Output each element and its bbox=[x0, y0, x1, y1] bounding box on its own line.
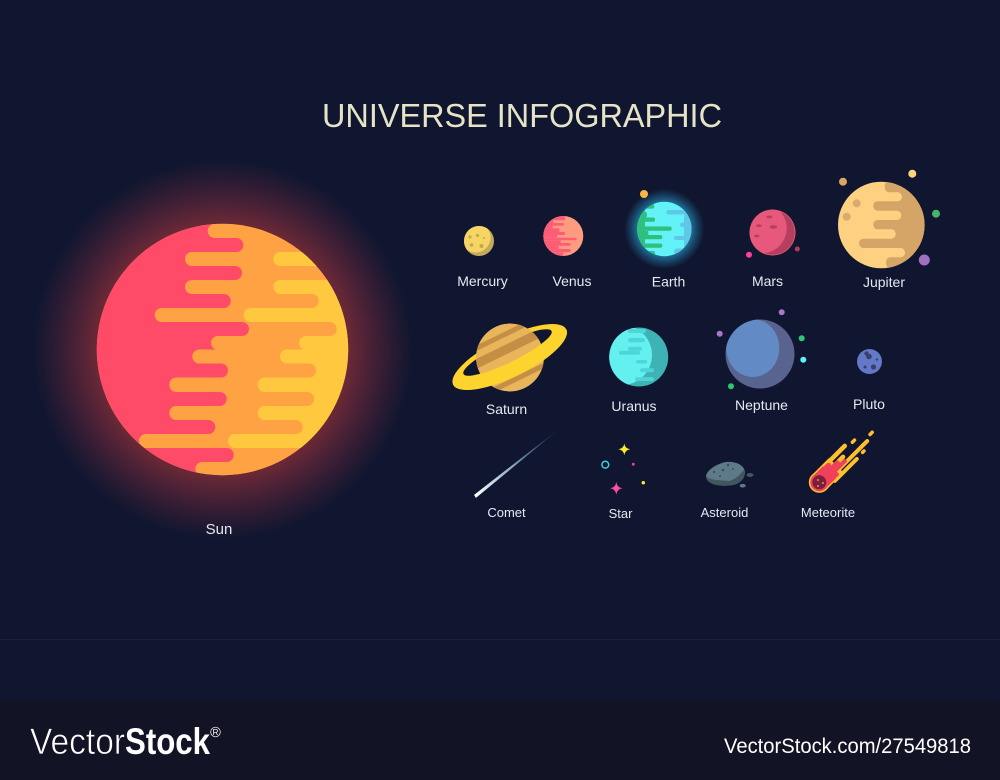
venus bbox=[543, 216, 591, 286]
asteroid fragments bbox=[746, 473, 754, 477]
saturn bbox=[452, 324, 567, 414]
neptune: Neptune bbox=[735, 397, 788, 413]
sun glow bbox=[32, 160, 412, 540]
pluto: Pluto bbox=[853, 396, 885, 412]
earth glow bbox=[624, 189, 704, 269]
venus: Venus bbox=[553, 273, 591, 289]
jupiter: Jupiter bbox=[863, 274, 905, 290]
mars: Mars bbox=[752, 273, 783, 289]
jupiter moons bbox=[839, 178, 847, 186]
mercury: Mercury bbox=[457, 273, 508, 289]
earth: Earth bbox=[652, 274, 685, 290]
saturn ring back bbox=[444, 311, 575, 403]
sun body bbox=[96, 224, 348, 476]
meteorite head bbox=[809, 472, 829, 492]
jupiter craters bbox=[853, 199, 861, 207]
watermark url: VectorStock.com/27549818 bbox=[724, 735, 971, 758]
sun bbox=[32, 160, 412, 540]
mercury bbox=[457, 222, 508, 289]
footer band bbox=[0, 700, 1000, 780]
watermark logo bbox=[30, 721, 220, 762]
earth moon bbox=[640, 190, 648, 198]
comet: Comet bbox=[487, 505, 526, 520]
mars moons bbox=[746, 252, 752, 258]
meteorite bbox=[801, 422, 880, 520]
yellow sparkle bbox=[618, 444, 630, 455]
saturn: Saturn bbox=[486, 401, 527, 417]
meteorite: Meteorite bbox=[801, 505, 855, 520]
watermark logo: R bbox=[213, 728, 219, 737]
asteroid bbox=[701, 462, 754, 520]
pluto bbox=[853, 349, 885, 412]
pink sparkle bbox=[610, 482, 623, 495]
neptune bbox=[717, 309, 806, 413]
neptune moons bbox=[779, 309, 785, 315]
watermark logo: Stock bbox=[125, 721, 210, 762]
uranus: Uranus bbox=[611, 398, 657, 414]
sun label: Sun bbox=[206, 521, 232, 538]
title: UNIVERSE INFOGRAPHIC bbox=[322, 98, 722, 135]
saturn body bbox=[476, 324, 544, 392]
watermark logo: Vector bbox=[30, 721, 125, 762]
cyan ring bbox=[602, 461, 609, 468]
star bbox=[602, 444, 645, 521]
mars bbox=[746, 210, 800, 286]
jupiter bbox=[838, 170, 940, 290]
star: Star bbox=[609, 506, 633, 521]
earth bbox=[624, 189, 704, 290]
comet bbox=[474, 432, 555, 520]
red flame bbox=[813, 451, 850, 489]
yellow tail bbox=[812, 422, 880, 491]
saturn ring front bbox=[453, 329, 567, 390]
uranus bbox=[609, 328, 668, 411]
asteroid: Asteroid bbox=[701, 505, 748, 520]
